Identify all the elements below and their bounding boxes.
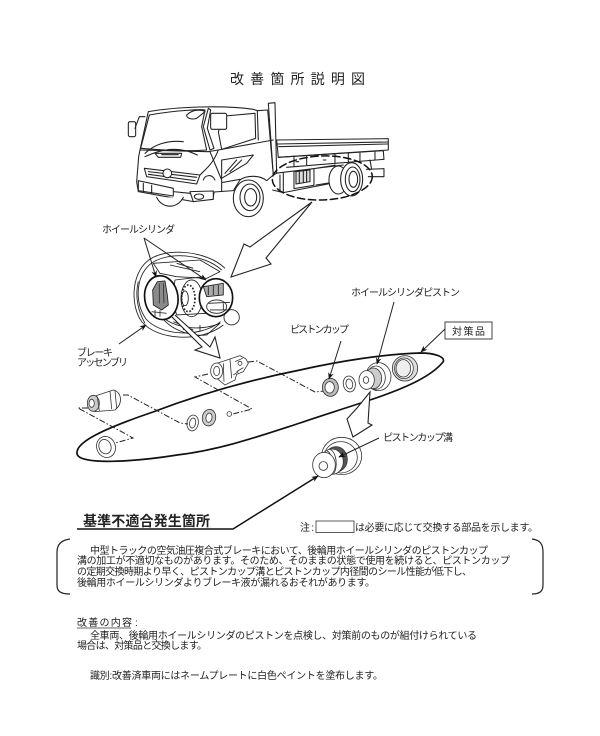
seal ring bbox=[342, 375, 357, 393]
wheel cylinder piston pointer arrow bbox=[377, 302, 394, 364]
dust boot bbox=[392, 356, 418, 381]
text block: improvement details bbox=[77, 629, 477, 652]
exploded parts: cylinder body, seals and pistons bbox=[87, 356, 248, 460]
text block: improvement details: 全車両、後輪用ホイールシリンダのピストンを点検し、対策前のものが組付けられている bbox=[90, 629, 477, 642]
large arrow: truck to brake assembly bbox=[231, 202, 312, 277]
countermeasure ellipse bbox=[77, 353, 443, 461]
text block: defect description: の定期交換時期より早く、ピストンカップ溝とピストンカップ内径間のシール性能が低下し、 bbox=[77, 565, 472, 578]
label: brake assembly bbox=[77, 346, 128, 369]
left wheel cylinder, highlighted bbox=[142, 274, 181, 322]
text block: defect description bbox=[77, 544, 510, 589]
illustration: truck bbox=[128, 103, 388, 217]
text block: defect description: 溝の加工が不適切なものがあります。そのため、そのままの状態で使用を続けると、ピストンカップ bbox=[77, 554, 510, 567]
label: brake assembly: ブレーキ bbox=[77, 346, 113, 359]
heading: defect location: 基準不適合発生箇所 bbox=[83, 513, 210, 529]
label: wheel cylinder piston: ホイールシリンダピストン bbox=[351, 286, 460, 299]
defect location leader arrow bbox=[77, 476, 318, 529]
countermeasure pointer arrow bbox=[421, 329, 445, 352]
wheel cylinder pointer arrows bbox=[144, 238, 206, 280]
left piston assembly bbox=[87, 390, 120, 412]
seal rings bbox=[94, 408, 232, 460]
illustration: piston detail bbox=[313, 437, 362, 478]
note: replacement legend: は必要に応じて交換する部品を示します。 bbox=[355, 521, 538, 534]
exploded parts: piston cup and piston bbox=[322, 356, 418, 396]
illustration: brake assembly bbox=[134, 252, 239, 337]
wheel cylinder piston bbox=[359, 363, 391, 391]
flatbed and chassis bbox=[273, 139, 388, 196]
cylinder body bbox=[211, 356, 248, 385]
label: piston cup: ピストンカップ bbox=[290, 324, 349, 336]
right wheel cylinder, highlighted bbox=[199, 279, 233, 317]
title: 改善箇所説明図 bbox=[230, 71, 365, 87]
text block: identification: 識別:改善済車両にはネームプレートに白色ペイントを塗布します。 bbox=[90, 669, 383, 682]
text block: defect description: 後輪用ホイールシリンダよりブレーキ液が漏れるおそれがあります。 bbox=[77, 576, 375, 589]
front wheels bbox=[157, 180, 263, 217]
label: brake assembly: アッセンブリ bbox=[77, 356, 128, 369]
label: wheel cylinder: ホイールシリンダ bbox=[102, 223, 175, 236]
note: replacement legend bbox=[300, 521, 538, 534]
note: replacement legend: 注: bbox=[300, 521, 314, 534]
heading: improvement details: 改善の内容 bbox=[77, 616, 132, 629]
piston cup bbox=[322, 378, 338, 396]
piston cup pointer arrow bbox=[329, 341, 341, 379]
label box: countermeasure part: 対策品 bbox=[452, 325, 485, 338]
text block: defect description: 中型トラックの空気油圧複合式ブレーキにおいて、後輪用ホイールシリンダのピストンカップ bbox=[90, 544, 488, 557]
brake assembly pointer arrow bbox=[119, 325, 146, 344]
dash-dot assembly lines bbox=[78, 361, 325, 443]
dashed location ellipse bbox=[272, 154, 373, 202]
mirrors bbox=[128, 108, 227, 150]
large arrow outline: cylinder to exploded view bbox=[172, 315, 220, 358]
large arrow: piston to groove detail bbox=[347, 392, 372, 437]
heading: improvement details: : bbox=[135, 618, 138, 629]
cab body bbox=[137, 103, 277, 202]
label: piston cup groove: ピストンカップ溝 bbox=[383, 431, 453, 444]
label box: countermeasure part bbox=[445, 322, 492, 339]
text block: improvement details: 場合は、対策品と交換します。 bbox=[77, 639, 207, 652]
piston cup groove pointer arrow bbox=[339, 438, 379, 457]
bracket frame: defect description bbox=[57, 539, 543, 594]
